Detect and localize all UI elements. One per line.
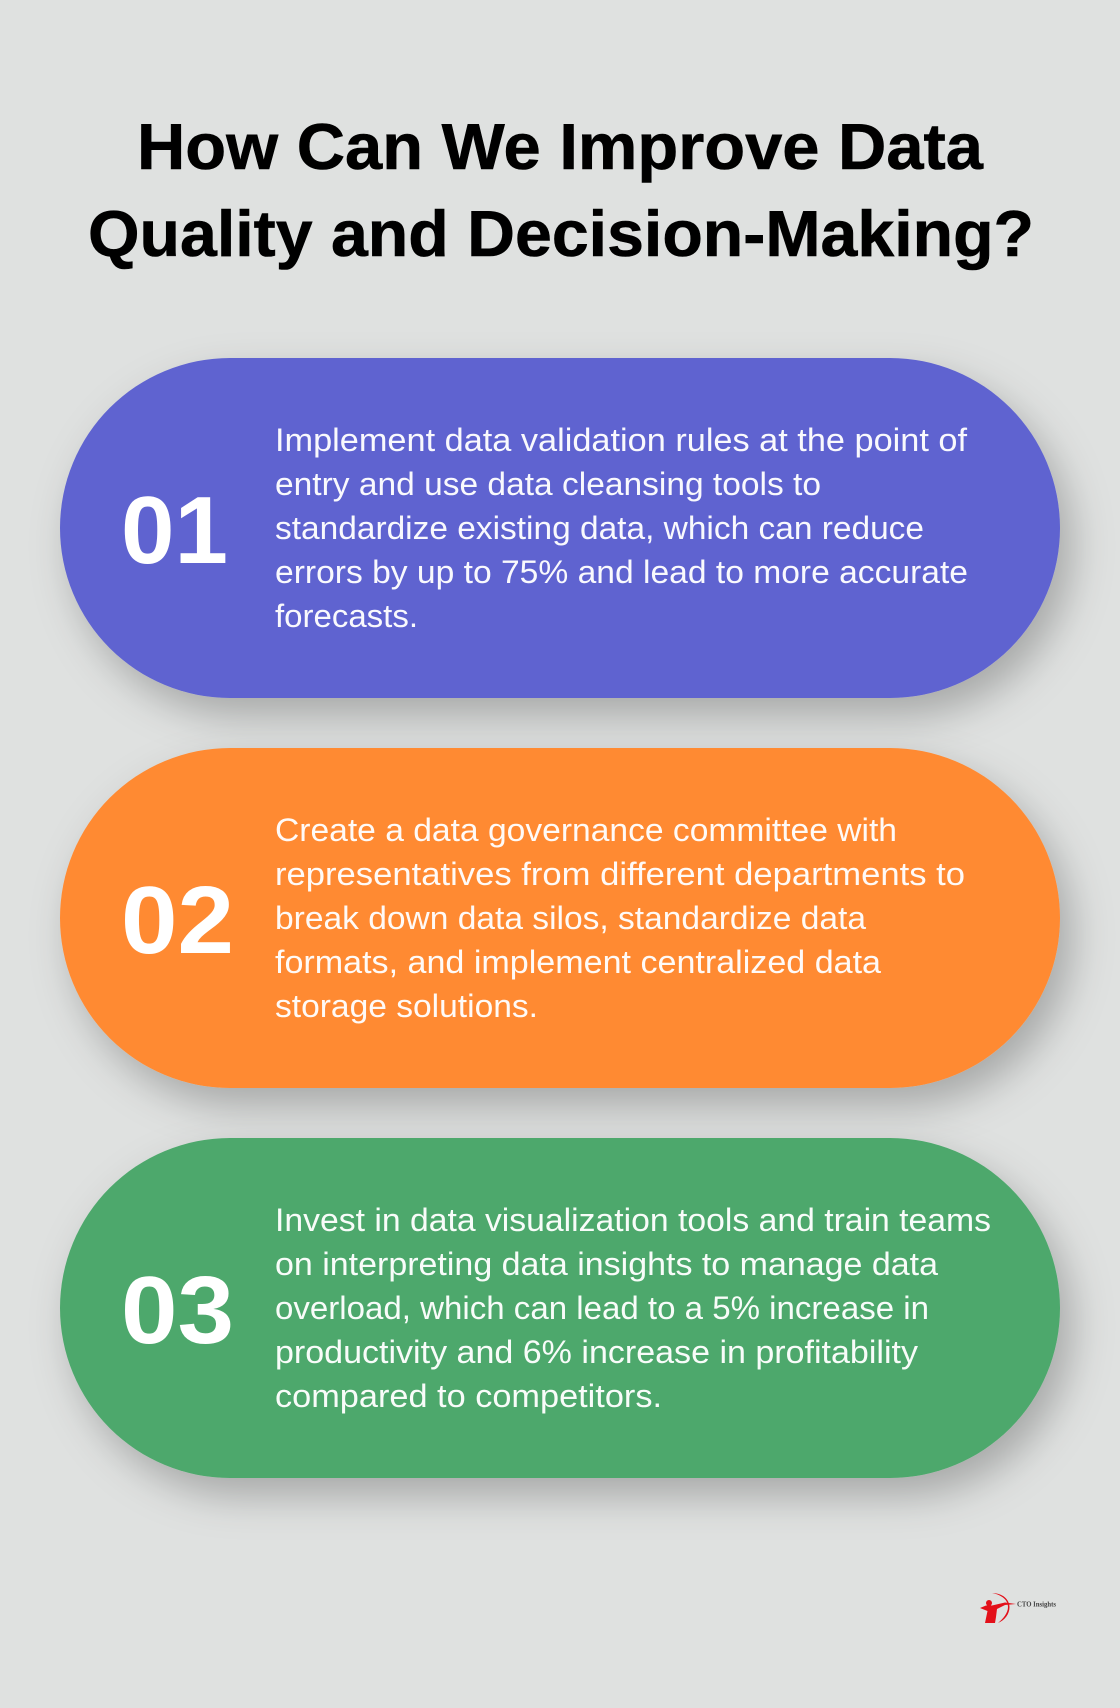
pill background orange (60, 748, 1060, 1088)
step 03 text: on interpreting data insights to manage data (275, 1246, 938, 1282)
step 02 text: Create a data governance committee with (275, 812, 897, 848)
step 01 text: entry and use data cleansing tools to (275, 466, 821, 502)
step 01 text: Implement data validation rules at the point of (275, 422, 967, 458)
step 02 text: formats, and implement centralized data (275, 944, 881, 980)
step 01 text: errors by up to 75% and lead to more accurate (275, 554, 968, 590)
pill background purple (60, 358, 1060, 698)
step 03 text: productivity and 6% increase in profitability (275, 1334, 918, 1370)
step 02 text: representatives from different departments to (275, 856, 965, 892)
step 03 text (275, 1202, 991, 1414)
logo: CTO Insights (980, 1593, 1056, 1623)
step 03 text: overload, which can lead to a 5% increase in (275, 1290, 929, 1326)
pill background green (60, 1138, 1060, 1478)
number 02: 02 (121, 867, 234, 974)
panel: step 02 (60, 748, 1060, 1088)
title: Quality and Decision-Making? (88, 197, 1034, 270)
brand name: CTO Insights (1017, 1600, 1056, 1608)
title: How Can We Improve Data (137, 110, 984, 183)
step 01 text (275, 422, 968, 634)
step 03 text: compared to competitors. (275, 1378, 662, 1414)
number 03: 03 (121, 1257, 234, 1364)
number 01: 01 (121, 477, 228, 584)
step 01 text: forecasts. (275, 598, 418, 634)
panel: step 03 (60, 1138, 1060, 1478)
step 02 text (275, 812, 965, 1024)
step 01 text: standardize existing data, which can reduce (275, 510, 924, 546)
panel: step 01 (60, 358, 1060, 698)
step 02 text: storage solutions. (275, 988, 538, 1024)
step 02 text: break down data silos, standardize data (275, 900, 866, 936)
title (88, 110, 1034, 270)
step 03 text: Invest in data visualization tools and train teams (275, 1202, 991, 1238)
icon: red archer (980, 1593, 1016, 1623)
